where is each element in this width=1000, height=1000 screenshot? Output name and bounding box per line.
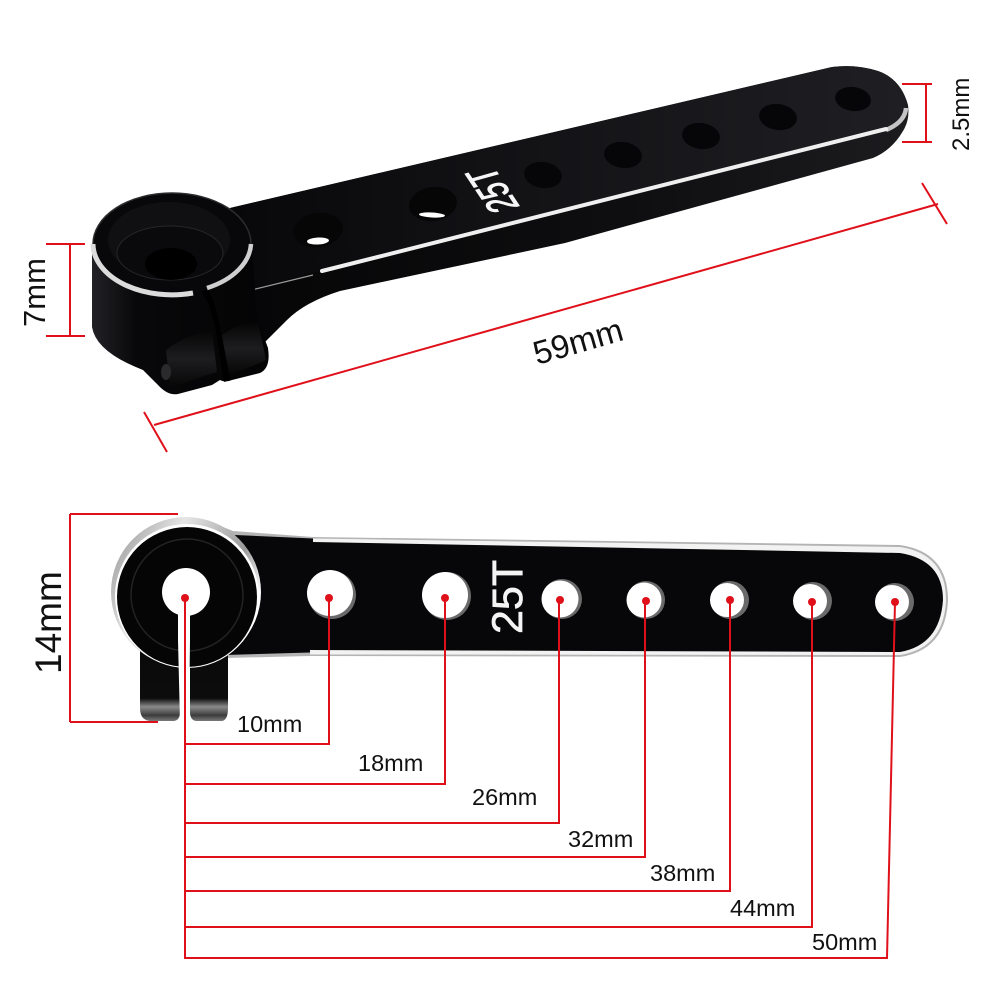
dimension: 14mm bbox=[28, 514, 178, 722]
clamp lugs bbox=[140, 650, 228, 721]
clamp hub bbox=[92, 193, 269, 394]
hole distance labels: 38mm bbox=[650, 860, 715, 886]
dimension: 7mm: 7mm bbox=[17, 258, 52, 327]
hole distance labels: 44mm bbox=[730, 895, 795, 921]
hole distance labels: 26mm bbox=[472, 784, 537, 810]
hole distance labels: 18mm bbox=[358, 750, 423, 776]
arm body bbox=[223, 527, 948, 658]
dimension: 14mm: 14mm bbox=[28, 571, 69, 674]
hole distance labels: 50mm bbox=[812, 929, 877, 955]
dimension: 2.5mm: 2.5mm bbox=[948, 78, 975, 151]
hole distance leader lines bbox=[185, 598, 895, 958]
arm holes bbox=[307, 570, 914, 621]
hole distance labels: 10mm bbox=[237, 711, 302, 737]
arm holes bbox=[291, 85, 872, 250]
round clamp hub bbox=[111, 517, 261, 722]
arm label 25T: 25T bbox=[484, 560, 532, 634]
dimension: 59mm: 59mm bbox=[529, 311, 627, 372]
arm body bbox=[200, 66, 908, 345]
hole distance labels: 32mm bbox=[568, 826, 633, 852]
clamp lugs bbox=[161, 279, 266, 388]
arm label 25T: 25T bbox=[456, 163, 529, 217]
dimension: 2.5mm bbox=[902, 78, 975, 151]
hole centre dots bbox=[181, 594, 899, 606]
dimension: 59mm bbox=[144, 183, 947, 452]
dimension: 7mm bbox=[17, 244, 85, 336]
panel: perspective view of servo arm bbox=[92, 66, 908, 394]
panel: top view of servo arm bbox=[111, 517, 948, 722]
hole distance labels bbox=[237, 711, 877, 955]
